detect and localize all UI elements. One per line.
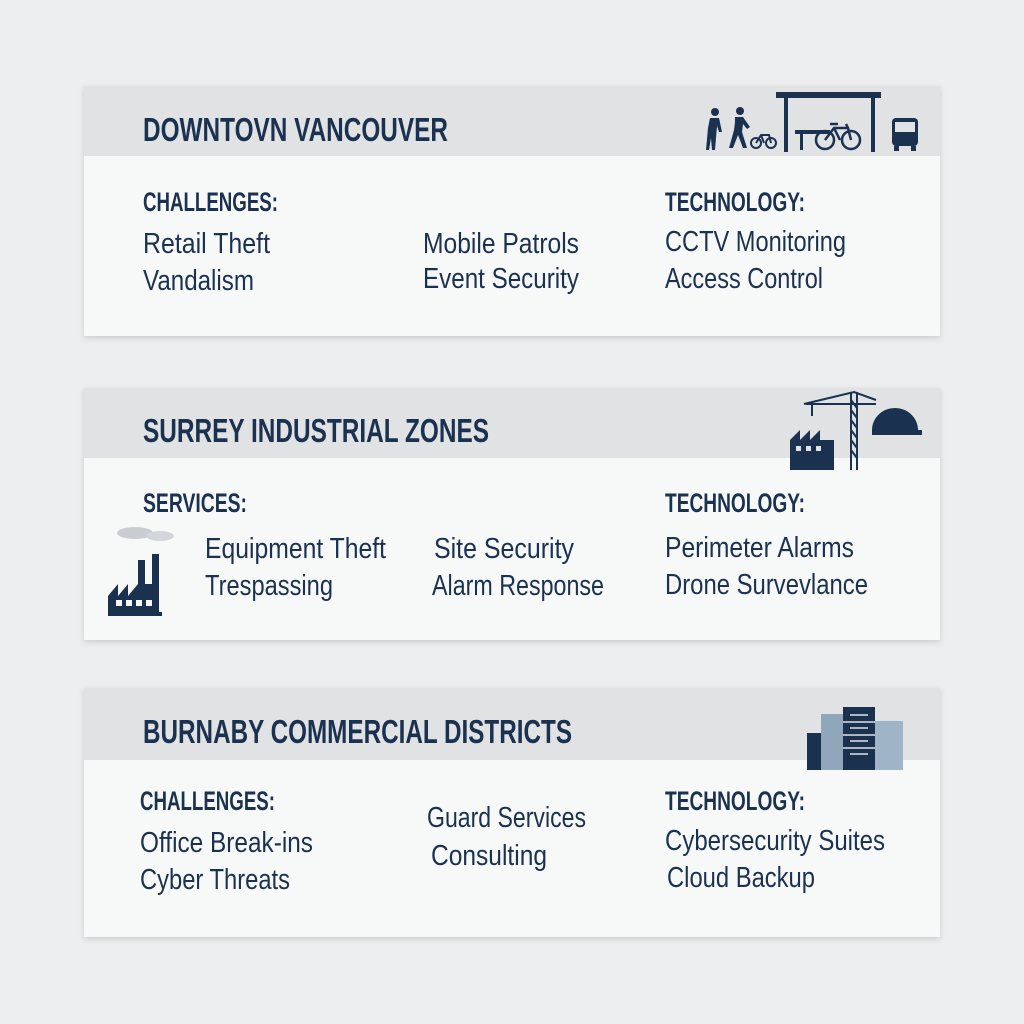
- column: services: Alarm Response: [432, 570, 604, 602]
- column: services: [423, 228, 579, 295]
- column: challenges: Vandalism: [143, 265, 254, 297]
- column: challenges: CHALLENGES:: [143, 187, 278, 217]
- column: challenges: Cyber Threats: [140, 864, 290, 896]
- column: services: Consulting: [431, 840, 547, 872]
- column: technology: [665, 187, 846, 295]
- column: technology: Access Control: [665, 263, 823, 295]
- column: technology: [665, 488, 868, 601]
- heading: burnaby: BURNABY COMMERCIAL DISTRICTS: [143, 713, 572, 750]
- column: challenges: CHALLENGES:: [140, 786, 275, 816]
- icon: factory crane helmet: [790, 392, 922, 470]
- column: challenges with factory icon: [108, 488, 386, 616]
- heading: surrey: SURREY INDUSTRIAL ZONES: [143, 412, 489, 449]
- panel: surrey industrial zones: [84, 388, 940, 640]
- column: technology: TECHNOLOGY:: [665, 786, 805, 816]
- column: challenges: [140, 786, 313, 896]
- panel: downtown vancouver: [84, 86, 940, 336]
- column: technology: Cloud Backup: [667, 862, 815, 894]
- panel: burnaby commercial districts: [84, 688, 940, 937]
- column: challenges: Retail Theft: [143, 228, 270, 260]
- column: services: Site Security: [434, 533, 574, 565]
- column: technology: [665, 786, 885, 894]
- column: technology: CCTV Monitoring: [665, 226, 846, 258]
- column: technology: Cybersecurity Suites: [665, 825, 885, 857]
- column: challenges with factory icon: SERVICES:: [143, 488, 247, 518]
- column: services: Guard Services: [427, 802, 586, 834]
- column: technology: TECHNOLOGY:: [665, 488, 805, 518]
- column: technology: Drone Survevlance: [665, 569, 868, 601]
- column: technology: TECHNOLOGY:: [665, 187, 805, 217]
- column: services: [432, 533, 604, 602]
- column: challenges with factory icon: Trespassing: [205, 570, 333, 602]
- icon: pedestrians, bikes, bus shelter, bus: [706, 92, 918, 152]
- column: services: Event Security: [423, 263, 579, 295]
- column: challenges with factory icon: Equipment Theft: [205, 533, 386, 565]
- column: technology: Perimeter Alarms: [665, 532, 854, 564]
- column: services: Mobile Patrols: [423, 228, 579, 260]
- column: challenges: Office Break-ins: [140, 827, 313, 859]
- column: services: [427, 802, 586, 872]
- icon: office buildings: [807, 707, 903, 770]
- heading: downtown: DOWNTOVN VANCOUVER: [143, 111, 448, 148]
- column: challenges: [143, 187, 278, 297]
